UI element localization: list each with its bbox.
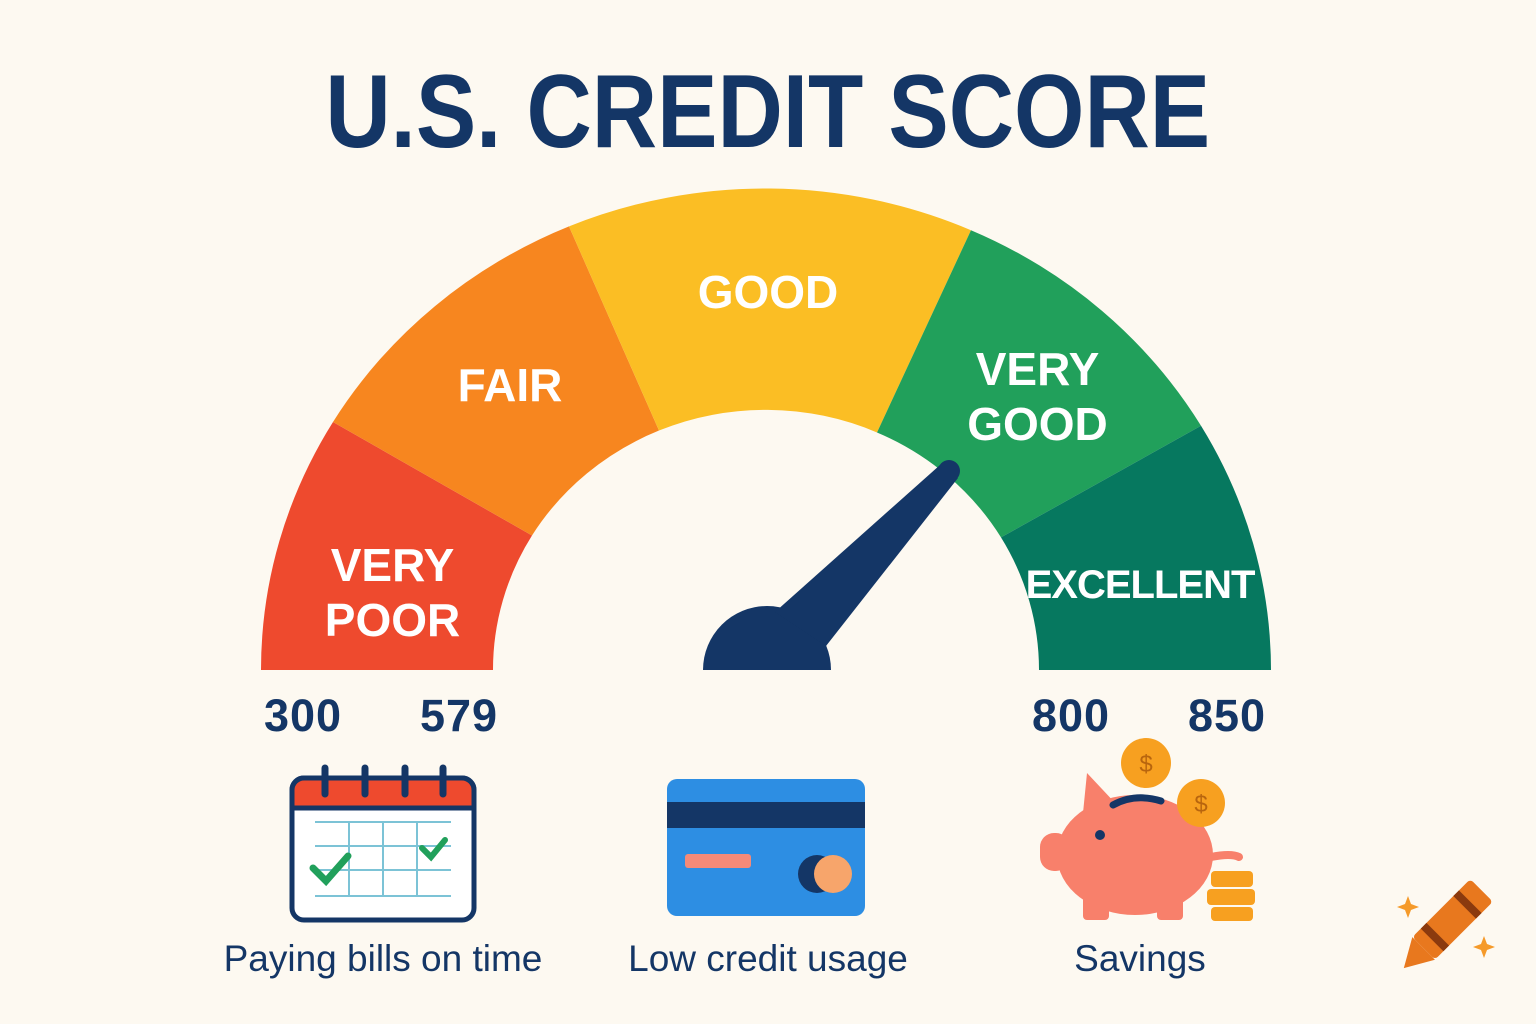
icon: credit card <box>667 779 865 916</box>
segment: very poor <box>261 422 532 670</box>
caption: paying bills: Paying bills on time <box>224 938 542 979</box>
icon: crayon <box>1397 880 1495 968</box>
icon: piggy bank <box>1040 738 1255 921</box>
label: very poor: VERY <box>331 539 454 591</box>
label: very good: GOOD <box>967 398 1108 450</box>
caption: low credit usage: Low credit usage <box>628 938 908 979</box>
icon: calendar <box>290 764 476 922</box>
numbers <box>264 690 1266 741</box>
segment: good <box>569 188 971 432</box>
label: very good <box>967 343 1108 450</box>
segment: excellent <box>1001 426 1271 670</box>
icon: piggy bank: $ <box>1139 751 1153 778</box>
label: very poor: POOR <box>325 594 460 646</box>
icon: piggy bank: $ <box>1194 791 1208 818</box>
label: good: GOOD <box>698 266 838 318</box>
numbers: 850 <box>1188 690 1266 741</box>
segment: very good <box>877 230 1201 537</box>
numbers: 300 <box>264 690 342 741</box>
segment: fair <box>333 226 659 535</box>
label: fair: FAIR <box>458 359 562 411</box>
needle <box>703 460 960 670</box>
label: excellent: EXCELLENT <box>1026 563 1254 607</box>
label: very poor <box>325 539 460 646</box>
numbers: 800 <box>1032 690 1110 741</box>
label: very good: VERY <box>976 343 1099 395</box>
caption: savings: Savings <box>1074 938 1206 979</box>
numbers: 579 <box>420 690 498 741</box>
title: U.S. CREDIT SCORE <box>325 54 1210 170</box>
